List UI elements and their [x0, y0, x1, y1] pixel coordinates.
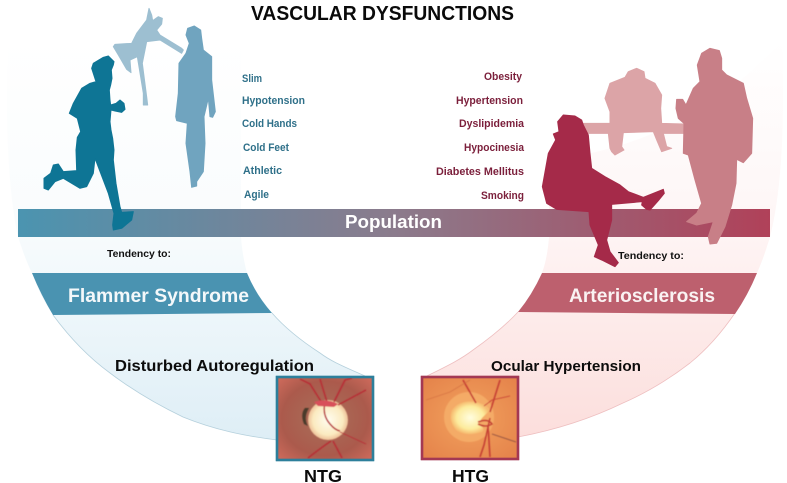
- left attributes list: Hypotension: [242, 95, 305, 107]
- icon: standing woman silhouette: [176, 26, 215, 187]
- right attributes list: [436, 71, 525, 202]
- left attributes list: [242, 73, 305, 201]
- HTG fundus photo: [422, 377, 518, 459]
- title: VASCULAR DYSFUNCTIONS: [251, 3, 514, 25]
- left arc outline: [53, 313, 365, 440]
- right arc outline: [427, 312, 735, 437]
- icon: standing man silhouette: [676, 48, 753, 244]
- right attributes list: Dyslipidemia: [459, 118, 525, 130]
- icon: runner silhouette: [44, 56, 133, 230]
- right attributes list: Diabetes Mellitus: [436, 166, 524, 178]
- population bar: [18, 209, 770, 237]
- population bar: Population: [345, 212, 442, 232]
- Flammer Syndrome banner: Flammer Syndrome: [68, 286, 249, 307]
- tendency label right: Tendency to:: [618, 250, 684, 262]
- NTG fundus photo: [277, 377, 373, 460]
- Arteriosclerosis banner: [518, 273, 757, 314]
- icon: dancer silhouette: [113, 8, 183, 105]
- icon: seated person on bench silhouette: [572, 68, 683, 155]
- Arteriosclerosis banner: Arteriosclerosis: [569, 286, 715, 307]
- left arc: Flammer pathway: [7, 40, 365, 440]
- left attributes list: Agile: [244, 189, 269, 201]
- right attributes list: Smoking: [481, 190, 524, 202]
- left attributes list: Cold Feet: [243, 142, 289, 154]
- tendency label left: Tendency to:: [107, 248, 171, 260]
- Flammer Syndrome banner: [32, 273, 272, 315]
- right attributes list: Hypocinesia: [464, 142, 525, 154]
- icon: seated man silhouette: [542, 115, 664, 267]
- right attributes list: Obesity: [484, 71, 523, 83]
- Disturbed Autoregulation label: Disturbed Autoregulation: [115, 358, 314, 375]
- right attributes list: Hypertension: [456, 95, 523, 107]
- Ocular Hypertension label: Ocular Hypertension: [491, 358, 641, 375]
- left attributes list: Cold Hands: [242, 118, 297, 130]
- right arc: Arteriosclerosis pathway: [427, 40, 783, 437]
- left attributes list: Slim: [242, 73, 262, 85]
- left attributes list: Athletic: [243, 165, 282, 177]
